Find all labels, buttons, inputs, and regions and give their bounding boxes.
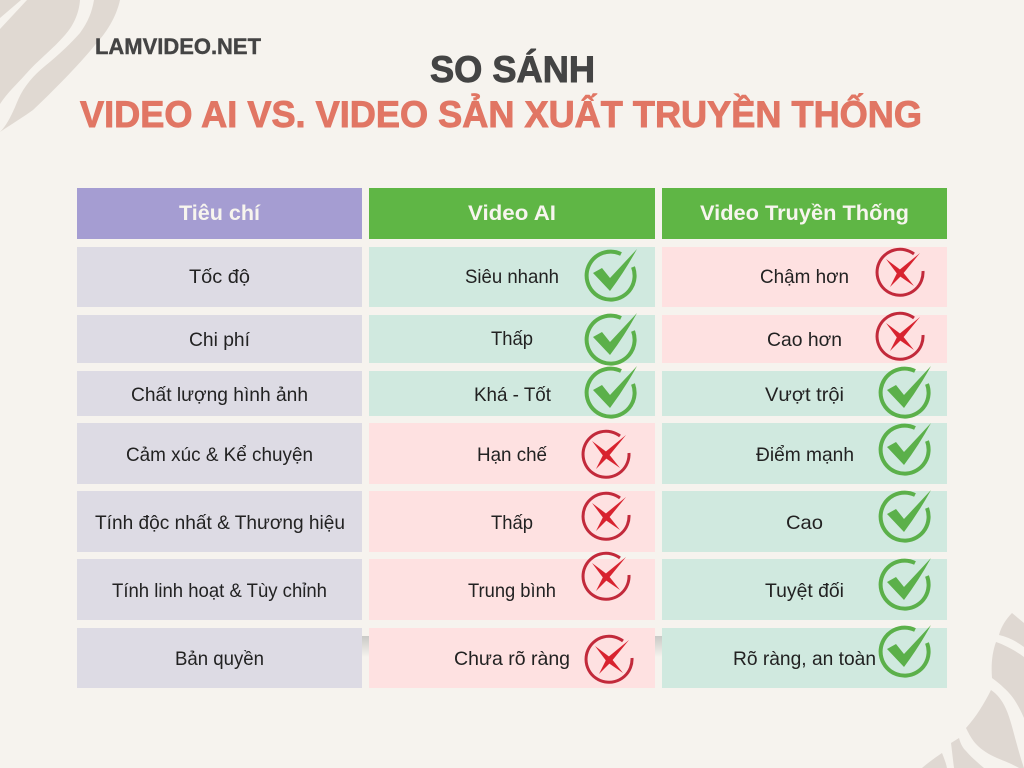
criterion: Tính độc nhất & Thương hiệu	[95, 512, 345, 534]
traditional cell	[662, 423, 947, 484]
header: Video AI: Video AI	[468, 202, 556, 225]
Video AI cell	[369, 423, 655, 484]
Video AI cell	[369, 553, 655, 620]
row: Chi phí	[77, 313, 947, 364]
traditional cell	[662, 490, 947, 552]
Video AI cell	[369, 247, 655, 307]
criterion	[77, 628, 362, 688]
row: Tính độc nhất & Thương hiệu	[77, 490, 947, 552]
traditional cell: Tuyệt đối	[765, 580, 844, 602]
traditional cell: Điểm mạnh	[756, 444, 854, 466]
traditional cell	[662, 366, 947, 417]
criterion	[77, 559, 362, 620]
criterion: Bản quyền	[175, 648, 264, 670]
traditional cell	[662, 313, 947, 363]
brand label: LAMVIDEO.NET	[95, 34, 262, 59]
criterion: Tính linh hoạt & Tùy chỉnh	[112, 580, 327, 602]
title line 2: VIDEO AI VS. VIDEO SẢN XUẤT TRUYỀN THỐNG	[80, 93, 922, 135]
icon: check	[881, 490, 931, 541]
traditional cell	[662, 558, 947, 620]
Video AI cell: Siêu nhanh	[465, 266, 559, 288]
icon: check	[587, 366, 637, 417]
traditional cell: Rõ ràng, an toàn	[733, 648, 876, 670]
icon: cross	[877, 249, 923, 295]
criterion: Chi phí	[189, 329, 251, 351]
criterion	[77, 491, 362, 552]
row: Tính linh hoạt & Tùy chỉnh	[77, 553, 947, 620]
Video AI cell: Trung bình	[468, 580, 556, 602]
criterion: Tốc độ	[189, 266, 250, 288]
criterion: Chất lượng hình ảnh	[131, 384, 308, 406]
icon: cross	[586, 636, 632, 682]
icon: check	[587, 249, 637, 300]
decoration: top-left leaf	[0, 0, 120, 132]
icon: cross	[583, 493, 629, 539]
Video AI cell	[369, 313, 655, 364]
traditional cell: Chậm hơn	[760, 266, 849, 288]
header: Video Truyền Thống	[662, 188, 947, 239]
criterion	[77, 371, 362, 416]
criterion: Cảm xúc & Kể chuyện	[126, 444, 313, 466]
Video AI cell: Chưa rõ ràng	[454, 648, 570, 670]
decoration: bottom-right leaf	[922, 613, 1024, 768]
Video AI cell	[369, 628, 655, 688]
Video AI cell: Hạn chế	[477, 444, 547, 466]
header: Video Truyền Thống: Video Truyền Thống	[700, 202, 909, 225]
Video AI cell	[369, 366, 655, 417]
icon: check	[587, 313, 637, 364]
title	[80, 49, 922, 135]
icon: check	[881, 423, 931, 474]
icon: cross	[877, 313, 923, 359]
header: Tiêu chí	[77, 188, 362, 239]
traditional cell: Vượt trội	[765, 384, 844, 406]
icon: cross	[583, 431, 629, 477]
row: Chất lượng hình ảnh	[77, 366, 947, 417]
traditional cell: Cao hơn	[767, 329, 842, 351]
row: Bản quyền	[77, 625, 947, 688]
criterion	[77, 247, 362, 307]
traditional cell: Cao	[786, 512, 823, 534]
row: Tốc độ	[77, 247, 947, 307]
criterion	[77, 423, 362, 484]
row: Cảm xúc & Kể chuyện	[77, 423, 947, 484]
traditional cell	[662, 247, 947, 307]
Video AI cell: Thấp	[491, 512, 533, 534]
Video AI cell: Thấp	[491, 328, 533, 350]
Video AI cell	[369, 491, 655, 552]
criterion	[77, 315, 362, 363]
traditional cell	[662, 625, 947, 688]
header: Tiêu chí: Tiêu chí	[179, 202, 261, 225]
header row	[77, 188, 947, 239]
Video AI cell: Khá - Tốt	[474, 384, 552, 406]
icon: check	[881, 558, 931, 609]
icon: check	[881, 366, 931, 417]
title line 1: SO SÁNH	[430, 49, 595, 90]
icon: check	[881, 625, 931, 676]
icon: cross	[583, 553, 629, 599]
comparison table	[77, 188, 947, 688]
header: Video AI	[369, 188, 655, 239]
